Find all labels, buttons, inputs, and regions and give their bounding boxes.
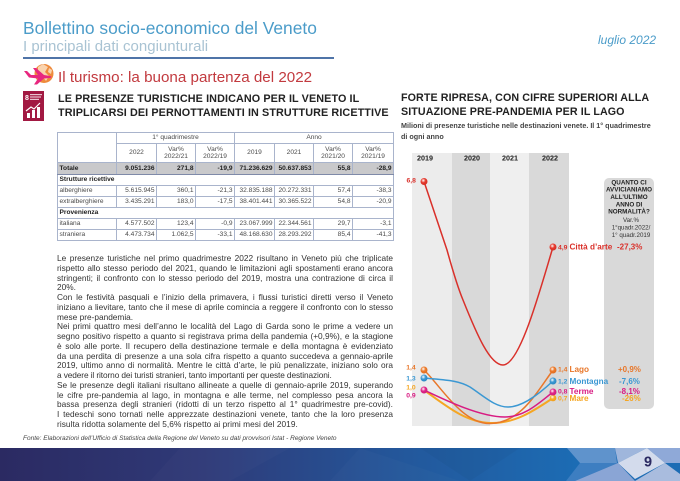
callout box <box>604 178 654 409</box>
data table: 4.577.502 <box>125 220 154 227</box>
series: Lago: Lago <box>570 365 589 374</box>
body text: segno positivo rispetto a quanto si registrava prima della pandemia (+0,9%), e la stagione <box>57 331 393 341</box>
data table: 3.435.291 <box>125 198 154 205</box>
callout box: AVVICIANIAMO <box>606 186 652 194</box>
data table: Totale <box>60 165 78 172</box>
callout box: QUANTO CI <box>611 179 647 186</box>
data table: 271,8 <box>177 165 194 172</box>
subtitle: I principali dati congiunturali <box>23 38 208 55</box>
data table: 55,8 <box>338 165 350 172</box>
year labels: 2019 <box>417 154 433 162</box>
data table: 85,4 <box>338 231 350 238</box>
year labels: 2021 <box>502 154 518 162</box>
body text: 2019, ultimo anno di normalità. Mentre le città d’arte, le più penalizzate, iniziano solo ora <box>57 360 393 370</box>
data table: 2021 <box>287 149 301 156</box>
footer band <box>0 448 680 481</box>
series: Terme: 0,9 <box>406 392 416 400</box>
data table: 123,4 <box>177 220 194 227</box>
title: Bollettino socio-economico del Veneto <box>23 18 317 38</box>
series: Terme: -8,1% <box>619 387 640 396</box>
data table: 1° quadrimestre <box>152 134 199 141</box>
series: Città d'arte: -27,3% <box>617 242 642 252</box>
data table: -3,1 <box>380 220 392 227</box>
data table: 50.637.853 <box>278 165 312 172</box>
data table: 30.365.522 <box>278 198 312 205</box>
series: Mare: 0,7 <box>558 396 568 403</box>
body text: stringenti; il confronto con lo stesso periodo del 2019, mostra una contrazione di circa il <box>57 272 393 282</box>
body text: iniziano a lievitare, tanto che il mese di aprile comincia a reggere il confronto con lo stesso <box>57 302 393 312</box>
data table: Strutture ricettive <box>60 176 114 183</box>
data table: -28,9 <box>376 165 392 172</box>
data table: -38,3 <box>376 187 392 194</box>
chart subtitle: di ogni anno <box>401 132 444 140</box>
series: Lago: 1,4 <box>406 364 416 372</box>
data table: 22.344.561 <box>278 220 312 227</box>
section heading: Il turismo: la buona partenza del 2022 <box>58 69 312 86</box>
data table: 1.062,5 <box>172 231 194 238</box>
header rule <box>23 57 334 59</box>
callout box: 1° quadr.2019 <box>612 232 651 239</box>
data table: 5.615.945 <box>125 187 154 194</box>
data table: 23.067.999 <box>239 220 272 227</box>
callout box: NORMALITÀ? <box>608 206 650 216</box>
body text: Se le presenze degli italiani risultano allineate a quelle di gennaio-aprile 2019, superando <box>57 380 393 390</box>
body text: Le presenze turistiche nel primo quadrimestre 2022 risultano in Veneto più che triplicate <box>57 253 393 263</box>
icon: SDG 8: 8 <box>25 95 29 102</box>
body text: 20%. <box>57 282 76 292</box>
data table: Provenienza <box>60 209 98 216</box>
data table: 2021/19 <box>361 153 385 160</box>
series: Mare: 1,0 <box>406 384 416 392</box>
series: Terme <box>406 386 640 417</box>
year labels: 2022 <box>542 154 558 162</box>
left heading: TRIPLICARSI DEI PERNOTTAMENTI IN STRUTTURE RICETTIVE <box>58 107 389 119</box>
series: Città d'arte: Città d’arte <box>570 242 613 252</box>
data table: -41,3 <box>376 231 392 238</box>
year bands <box>412 153 569 426</box>
data table: 2019 <box>247 149 262 156</box>
series: Montagna: Montagna <box>570 377 609 386</box>
data table: straniera <box>60 231 85 238</box>
series: Mare: Mare <box>570 394 589 403</box>
data table: 2021/20 <box>321 153 345 160</box>
data table: 48.168.630 <box>239 231 272 238</box>
data table: -17,5 <box>217 198 232 205</box>
series: Montagna: 1,2 <box>558 379 568 386</box>
data table: 9.051.236 <box>125 165 154 172</box>
body text: I tedeschi sono tornati nelle apprezzate destinazioni venete, tanto che la loro presenza <box>57 409 393 419</box>
data table: Var% <box>325 146 341 152</box>
right heading: SITUAZIONE PRE-PANDEMIA PER IL LAGO <box>401 106 625 118</box>
source note: Fonte: Elaborazioni dell’Ufficio di Statistica della Regione del Veneto su dati provvisori Istat - Regione Veneto <box>23 435 336 442</box>
data table: 54,8 <box>338 198 350 205</box>
data table <box>57 132 394 241</box>
data table: 28.293.292 <box>278 231 312 238</box>
data table: 2022/21 <box>164 153 188 160</box>
data table: -33,1 <box>217 231 232 238</box>
chart subtitle: Milioni di presenze turistiche nelle destinazioni venete. Il 1° quadrimestre <box>401 121 651 130</box>
series: Mare <box>406 384 641 423</box>
data table: 57,4 <box>338 187 350 194</box>
data table: 2022 <box>129 149 144 156</box>
data table: italiana <box>60 220 80 227</box>
data table: Var% <box>168 146 184 152</box>
body text: Con le festività pasquali e l’inizio della primavera, i flussi turistici diretti verso il Veneto <box>57 292 393 302</box>
data table: Var% <box>207 146 223 152</box>
data table: 183,0 <box>177 198 194 205</box>
right heading <box>401 92 649 118</box>
series: Città d'arte <box>406 178 642 365</box>
body text <box>57 253 393 429</box>
year labels: 2020 <box>464 154 480 162</box>
icon: plane and globe <box>24 64 54 84</box>
body text: a vedere il ritorno dei turisti stranieri, tanto importanti per queste destinazioni. <box>57 370 332 380</box>
series: Lago <box>406 364 641 424</box>
series: Città d'arte: 6,8 <box>406 178 416 184</box>
data table: -21,3 <box>217 187 232 194</box>
callout box: 1°quadr.2022/ <box>612 224 651 232</box>
body text: mese pre-pandemia. <box>57 312 133 322</box>
series: Lago: +0,9% <box>618 365 641 374</box>
callout box: ALL’ULTIMO <box>610 194 648 201</box>
data table: Var% <box>365 146 381 152</box>
series: Montagna <box>406 374 640 407</box>
body text: bassa presenza degli stranieri (ridotti di un terzo rispetto al 1° quadrimestre pre-covid). <box>57 399 393 409</box>
data table: -20,9 <box>376 198 392 205</box>
data table: 4.473.734 <box>125 231 154 238</box>
body text: Nei primi quattro mesi dell’anno le località del Lago di Garda sono le prime a vedere un <box>57 321 393 331</box>
data table: 360,1 <box>177 187 194 194</box>
series: Montagna: 1,3 <box>406 376 416 382</box>
callout box: ANNO DI <box>616 201 643 208</box>
right heading: FORTE RIPRESA, CON CIFRE SUPERIORI ALLA <box>401 92 649 104</box>
data table: -19,9 <box>217 165 232 172</box>
series: Terme: 0,8 <box>558 389 568 396</box>
data table: 20.272.331 <box>278 187 312 194</box>
body text: è solo alle porte. Il recupero della destinazione termale e della montagna è evidenziato <box>57 341 393 351</box>
callout box: Var.% <box>623 217 640 224</box>
data table: alberghiere <box>60 187 92 194</box>
left heading: LE PRESENZE TURISTICHE INDICANO PER IL VENETO IL <box>58 93 359 105</box>
data table: Anno <box>306 134 322 141</box>
data table: 29,7 <box>338 220 350 227</box>
data table: 32.835.188 <box>239 187 272 194</box>
series: Lago: 1,4 <box>558 367 568 374</box>
data table: 38.401.441 <box>239 198 272 205</box>
series: Montagna: -7,6% <box>619 377 640 386</box>
body text: risulta ridotta solamente del 5,6% rispetto ai primi mesi del 2019. <box>57 419 298 429</box>
series: Mare: -26% <box>622 394 641 403</box>
series: Città d'arte: 4,9 <box>558 244 568 252</box>
line chart <box>406 153 654 426</box>
body text: le cifre pre-pandemia al lago, in montagna e alle terme, nel complesso pesa ancora la <box>57 390 393 400</box>
chart subtitle <box>401 121 651 140</box>
data table: 71.236.629 <box>239 165 272 172</box>
body text: rispetto allo stesso periodo del 2021, quando le limitazioni agli spostamenti erano ancora <box>57 263 393 273</box>
body text: da una perdita di presenze a una sola cifra rispetto a quanto succedeva a gennaio-aprile <box>57 350 393 360</box>
series: Terme: Terme <box>570 387 594 396</box>
date: luglio 2022 <box>598 33 656 47</box>
data table: -0,9 <box>221 220 232 227</box>
data table: 2022/19 <box>203 153 227 160</box>
data table: extralberghiere <box>60 198 103 205</box>
icon: SDG 8 <box>23 91 44 121</box>
year labels <box>417 154 558 162</box>
page number: 9 <box>644 454 652 470</box>
left heading <box>58 93 389 119</box>
